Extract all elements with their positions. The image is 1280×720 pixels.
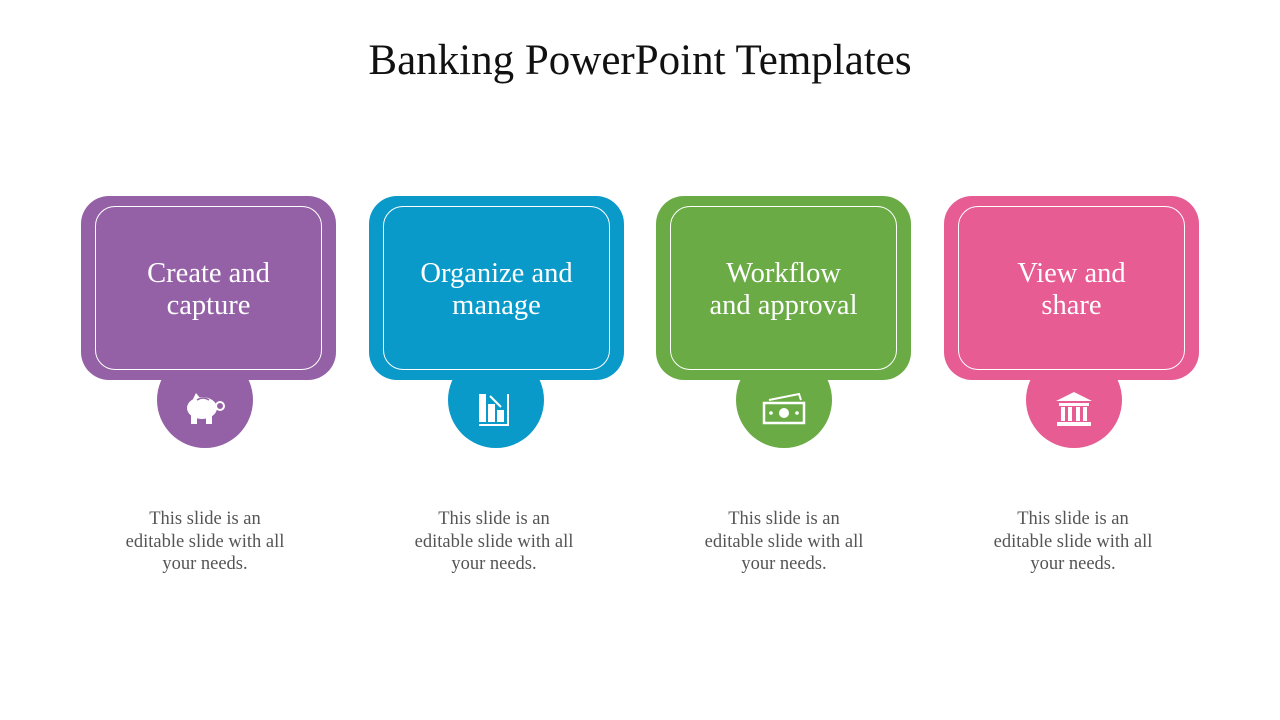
text block 4 — [994, 509, 1152, 574]
box: manage — [452, 290, 541, 321]
box — [369, 196, 624, 380]
icon: piggy bank — [157, 352, 253, 448]
text block 4: your needs. — [1030, 554, 1116, 574]
text block 3 — [705, 509, 863, 574]
text block 1: This slide is an — [149, 509, 261, 529]
box: and approval — [710, 290, 857, 321]
box: Organize and — [420, 258, 573, 289]
text block 2: editable slide with all — [415, 532, 573, 552]
text block 1 — [126, 509, 284, 574]
box — [81, 196, 336, 380]
panel: create and capture — [81, 196, 336, 448]
panel: workflow and approval — [656, 196, 911, 448]
text block 2: your needs. — [451, 554, 537, 574]
panel: organize and manage — [369, 196, 624, 448]
icon: bank — [1026, 352, 1122, 448]
box — [944, 196, 1199, 380]
box: Workflow — [726, 258, 841, 289]
title: Banking PowerPoint Templates — [368, 37, 912, 84]
icon: chart — [448, 352, 544, 448]
box — [656, 196, 911, 380]
text block 4: This slide is an — [1017, 509, 1129, 529]
text block 4: editable slide with all — [994, 532, 1152, 552]
box: View and — [1017, 258, 1126, 289]
icon: money — [736, 352, 832, 448]
text block 3: editable slide with all — [705, 532, 863, 552]
text block 2 — [415, 509, 573, 574]
text block 2: This slide is an — [438, 509, 550, 529]
text block 3: your needs. — [741, 554, 827, 574]
panel: view and share — [944, 196, 1199, 448]
text block 1: your needs. — [162, 554, 248, 574]
text block 1: editable slide with all — [126, 532, 284, 552]
box: share — [1041, 290, 1102, 321]
box: capture — [167, 290, 250, 321]
box: Create and — [147, 258, 270, 289]
text block 3: This slide is an — [728, 509, 840, 529]
